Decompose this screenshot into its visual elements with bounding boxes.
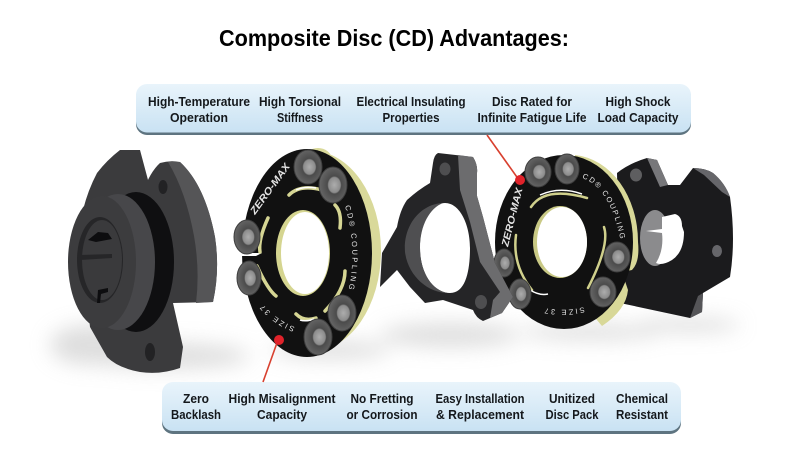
label: chemical resistant: Chemical <box>616 391 668 406</box>
yellow composite disc pack <box>575 155 638 326</box>
label: high misalignment capacity <box>228 391 336 422</box>
bottom panel: advantages <box>162 382 681 434</box>
label: easy installation and replacement: & Replacement <box>436 407 525 422</box>
label: electrical insulating properties <box>356 94 466 125</box>
title: Composite Disc (CD) Advantages: <box>219 25 569 51</box>
label: high shock load capacity: Load Capacity <box>598 110 679 125</box>
label: high-temperature operation <box>148 94 250 125</box>
disc coupling left: SIZE 37 <box>260 306 294 332</box>
label: electrical insulating properties: Electrical Insulating <box>356 94 466 109</box>
slots <box>515 194 605 290</box>
label: no fretting or corrosion: No Fretting <box>350 391 414 406</box>
top panel: advantages <box>136 84 691 135</box>
label: high torsional stiffness <box>259 94 341 125</box>
label: chemical resistant <box>616 391 669 422</box>
bore <box>533 206 587 278</box>
label: electrical insulating properties: Properties <box>382 110 440 125</box>
bolts <box>234 150 356 355</box>
label: easy installation and replacement: Easy Installation <box>436 391 525 406</box>
markings: ZERO-MAX <box>500 185 526 249</box>
markings: ZERO-MAX <box>248 161 294 218</box>
disc coupling right: CD® COUPLING <box>583 174 625 238</box>
label: unitized disc pack: Unitized <box>549 391 595 406</box>
label: high torsional stiffness: High Torsional <box>259 94 341 109</box>
left hub <box>68 150 217 373</box>
label: high-temperature operation: Operation <box>170 110 228 125</box>
label: disc rated for infinite fatigue life: Infinite Fatigue Life <box>478 110 586 125</box>
label: high torsional stiffness: Stiffness <box>277 110 323 125</box>
bore <box>276 210 330 296</box>
label: disc rated for infinite fatigue life: Disc Rated for <box>492 94 572 109</box>
label: high shock load capacity <box>598 94 679 125</box>
label: unitized disc pack: Disc Pack <box>546 407 599 422</box>
label: zero backlash: Zero <box>183 391 209 406</box>
label: easy installation and replacement <box>436 391 525 422</box>
disc coupling left: CD® COUPLING <box>346 206 358 290</box>
label: zero backlash: Backlash <box>171 407 221 422</box>
disc coupling right: SIZE 37 <box>544 308 584 315</box>
slots <box>257 188 345 319</box>
label: unitized disc pack <box>546 391 599 422</box>
black plate <box>242 149 372 357</box>
label: no fretting or corrosion: or Corrosion <box>346 407 418 422</box>
label: high misalignment capacity: Capacity <box>257 407 308 422</box>
label: disc rated for infinite fatigue life <box>478 94 586 125</box>
label: high misalignment capacity: High Misalignment <box>228 391 336 406</box>
disc coupling left <box>234 148 381 357</box>
disc coupling right <box>494 154 638 329</box>
right hub <box>617 158 733 318</box>
label: zero backlash <box>171 391 221 422</box>
label: high-temperature operation: High-Temperature <box>148 94 250 109</box>
label: no fretting or corrosion <box>346 391 418 422</box>
floor shadow <box>50 318 740 369</box>
label: chemical resistant: Resistant <box>616 407 669 422</box>
yellow composite disc pack <box>243 151 381 351</box>
middle hub <box>380 153 513 321</box>
callout pointer: bottom panel to left disc <box>263 335 284 382</box>
label: high shock load capacity: High Shock <box>606 94 671 109</box>
bolts <box>494 154 630 309</box>
callout pointer: top panel to right disc <box>487 135 525 185</box>
black plate <box>495 155 633 329</box>
